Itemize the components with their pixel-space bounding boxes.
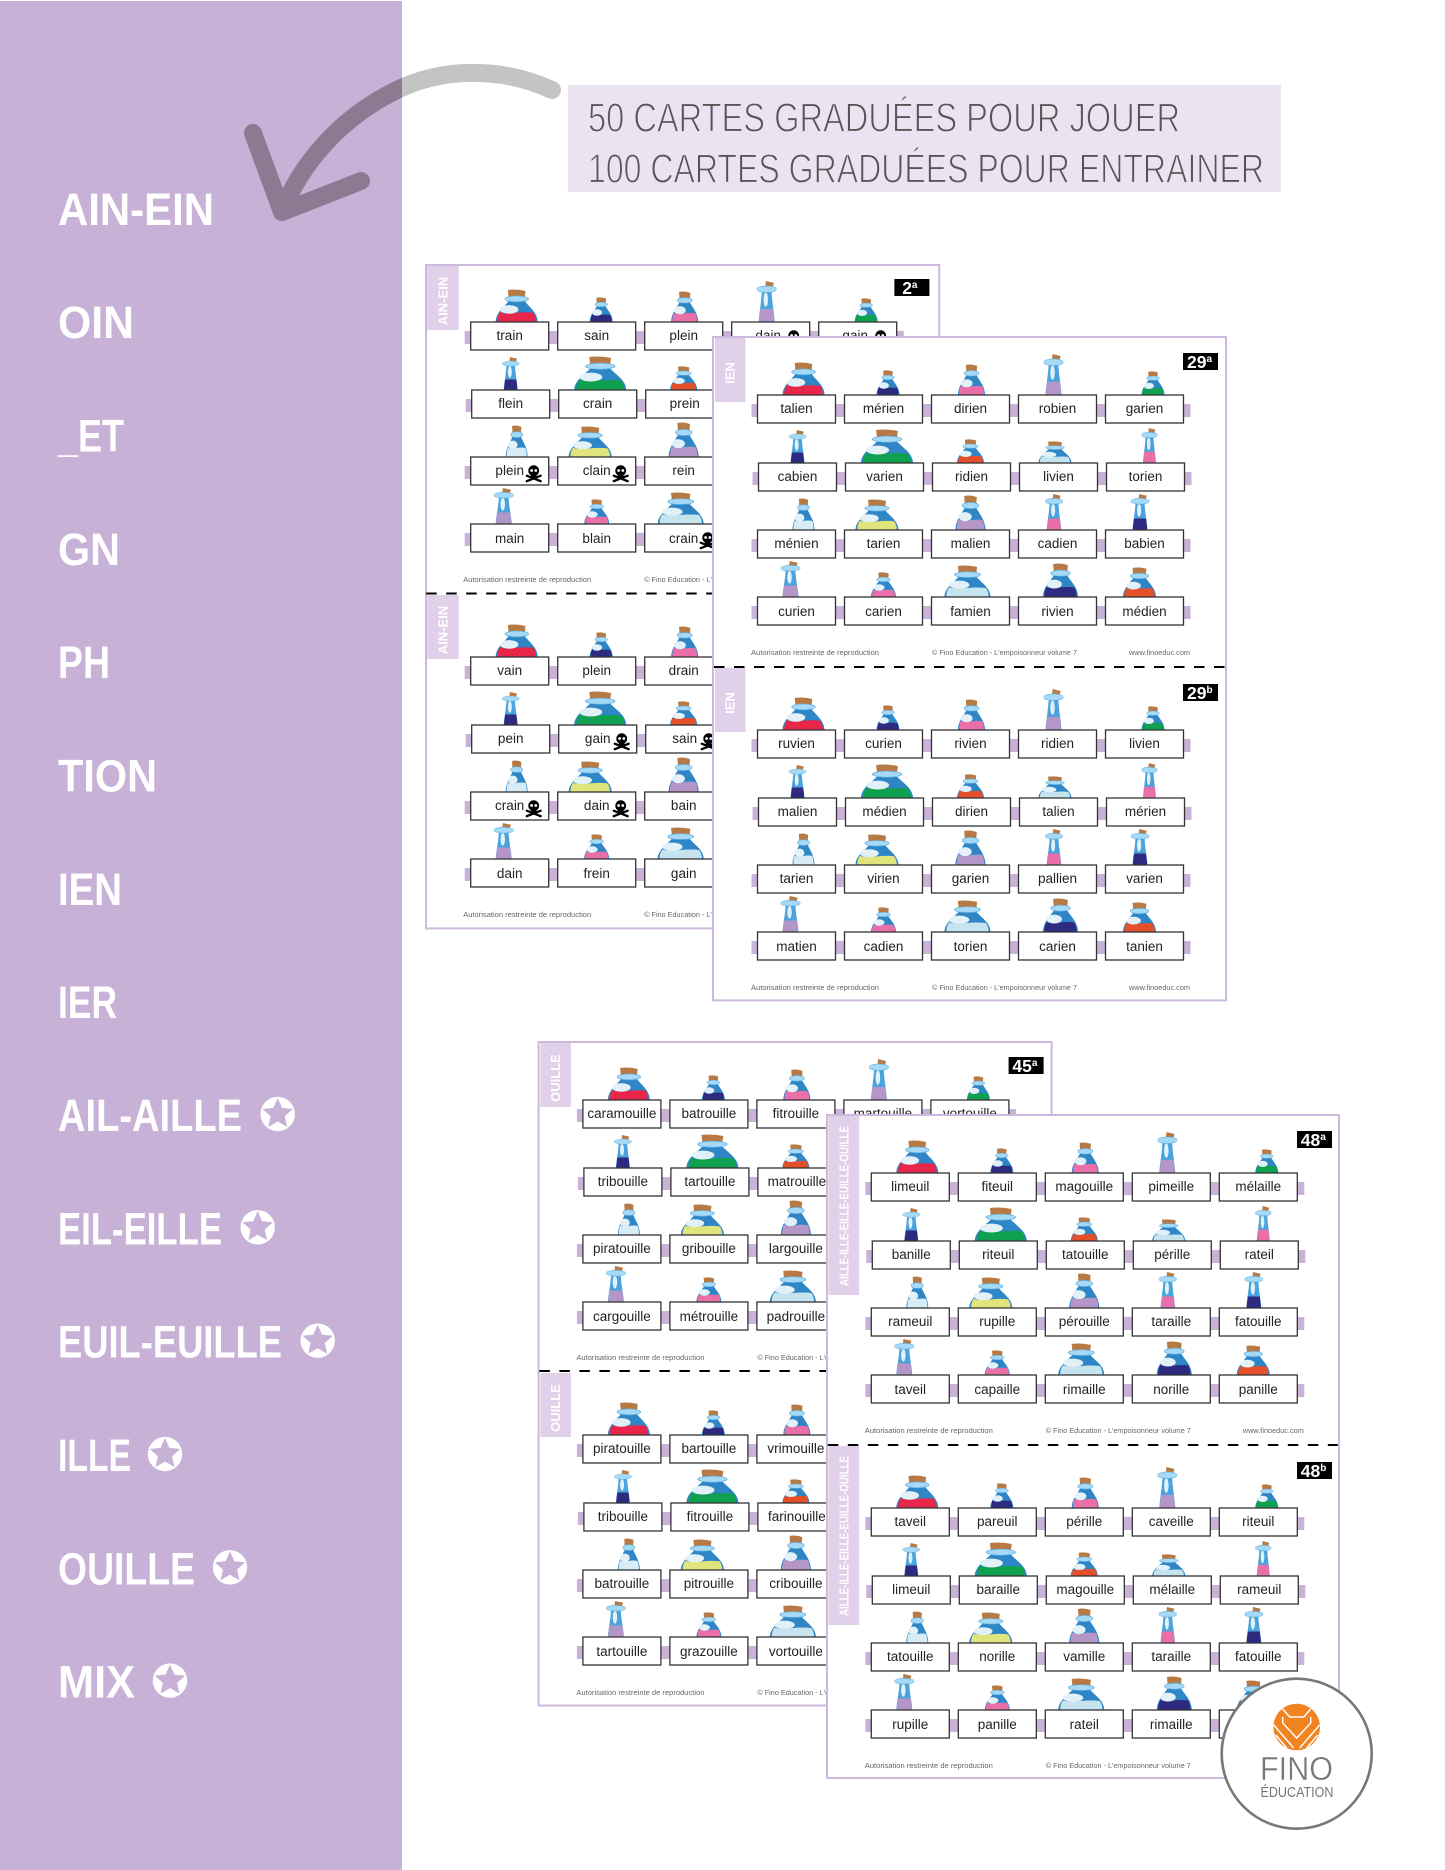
bottles and word cards — [752, 689, 1192, 960]
words row 4: rateil — [1070, 1717, 1099, 1732]
words row 1: garien — [1126, 401, 1163, 416]
words row 2: livien — [1043, 469, 1074, 484]
words row 3: ménien — [774, 536, 819, 551]
footer — [463, 576, 789, 584]
words row 3: tatouille — [887, 1649, 934, 1664]
words row 3: virien — [867, 871, 900, 886]
icon: star OUILLE — [213, 1550, 247, 1584]
icons: skulls row 3 — [527, 465, 628, 481]
sidebar item: _ET: _ET — [57, 411, 124, 462]
arrow: curved arrow pointing to sidebar — [253, 73, 552, 212]
words row 4: rupille — [892, 1717, 928, 1732]
badge: 29a — [1183, 352, 1218, 372]
bottles and word cards — [577, 1059, 1017, 1330]
words row 3: rupille — [979, 1314, 1015, 1329]
words row 3: crain — [495, 798, 524, 813]
sidebar item: OUILLE: OUILLE — [58, 1543, 195, 1594]
words row 2: dirien — [955, 804, 988, 819]
badge: 48a — [1297, 1130, 1332, 1150]
words row 1: mérien — [863, 401, 904, 416]
words row 3: pallien — [1038, 871, 1077, 886]
words row 4: frein — [584, 866, 610, 881]
icons: skulls row 3 — [527, 800, 628, 816]
badge: 29b: 29 — [1187, 683, 1206, 703]
words row 4: tartouille — [596, 1644, 647, 1659]
tab: OUILLE: OUILLE — [548, 1384, 563, 1432]
words row 2: rateil — [1245, 1247, 1274, 1262]
badge: 29b — [1183, 683, 1218, 703]
words row 4: matien — [776, 939, 817, 954]
footer: www.finoeduc.com — [1128, 985, 1190, 992]
sidebar item: GN: GN — [58, 524, 120, 575]
tab: AIN-EIN: AIN-EIN — [436, 606, 451, 654]
words row 3: taraille — [1151, 1649, 1191, 1664]
tab: mixed sounds: AILLE-ILLE-EILLE-EUILLE-OUILLE — [836, 1456, 851, 1616]
words row 1: train — [497, 328, 523, 343]
logo wordmark: FINO: FINO — [1260, 1750, 1333, 1787]
footer — [576, 1689, 903, 1697]
words row 4: blain — [582, 531, 611, 546]
tab: AIN-EIN — [427, 266, 459, 330]
bottles and word cards — [865, 1467, 1305, 1738]
sidebar item: PH: PH — [58, 637, 110, 688]
badge: 48b — [1297, 1461, 1332, 1481]
words row 3: cribouille — [769, 1576, 823, 1591]
words row 3: fatouille — [1235, 1649, 1282, 1664]
words row 4: métrouille — [680, 1309, 738, 1324]
words row 2: mérien — [1125, 804, 1166, 819]
sheet 29b — [715, 668, 1218, 992]
words row 3: pérouille — [1059, 1314, 1110, 1329]
words row 1: pimeille — [1148, 1179, 1194, 1194]
words row 1: drain — [669, 663, 699, 678]
words row 3: clain — [583, 463, 611, 478]
sidebar item: OIN: OIN — [58, 297, 134, 348]
tab: mixed sounds — [828, 1116, 859, 1295]
sheet 2b — [427, 595, 905, 919]
logo mark: orange chevrons — [1273, 1704, 1320, 1750]
badge: 2a: 2 — [902, 278, 912, 298]
words row 1: dain — [755, 328, 781, 343]
words row 1: dirien — [954, 401, 987, 416]
words row 3: plein — [495, 463, 524, 478]
words row 3: norille — [979, 1649, 1015, 1664]
footer: © Fino Education - L'empoisonneur volume 7 — [757, 1354, 903, 1362]
tab: OUILLE: OUILLE — [548, 1054, 563, 1102]
words row 2: tribouille — [598, 1174, 648, 1189]
words row 4: cadien — [864, 939, 903, 954]
words row 4: cargouille — [593, 1309, 651, 1324]
words row 2: matrouille — [768, 1174, 826, 1189]
words row 1: bartouille — [682, 1441, 736, 1456]
words row 1: robien — [1039, 401, 1076, 416]
words row 4: padrouille — [767, 1309, 825, 1324]
words row 3: largouille — [769, 1241, 823, 1256]
words row 1: ruvien — [778, 736, 815, 751]
icon: star EUIL-EUILLE — [300, 1324, 335, 1358]
words row 3: batrouille — [595, 1576, 649, 1591]
badge: 2a — [894, 278, 929, 298]
words row 4: rimaille — [1063, 1382, 1106, 1397]
words row 2: riteuil — [982, 1247, 1014, 1262]
words row 3: tarien — [780, 871, 813, 886]
words row 1: vain — [497, 663, 522, 678]
tab: IEN — [715, 668, 746, 732]
words row 1: riteuil — [1242, 1514, 1274, 1529]
words row 3: pitrouille — [684, 1576, 734, 1591]
words row 1: magouille — [1055, 1179, 1113, 1194]
words row 2: magouille — [1056, 1582, 1114, 1597]
words row 1: batrouille — [682, 1106, 736, 1121]
words row 2: cabien — [778, 469, 817, 484]
footer: © Fino Education - L'empoisonneur volume 7 — [932, 984, 1077, 992]
tab: IEN: IEN — [722, 692, 738, 714]
words row 4: famien — [950, 604, 991, 619]
bottles and word cards — [465, 616, 905, 887]
footer: © Fino Education - L'empoisonneur volume 7 — [1046, 1762, 1191, 1770]
sheet 48a — [828, 1116, 1332, 1435]
words row 2: crain — [583, 396, 612, 411]
bottles and word cards — [577, 1394, 1017, 1665]
words row 3: bain — [671, 798, 696, 813]
sheet 2a — [427, 266, 929, 584]
footer — [751, 649, 1190, 657]
footer: © Fino Education - L'empoisonneur volume 7 — [644, 576, 789, 584]
badge: 45a: 45 — [1012, 1056, 1032, 1076]
sheet 45b — [540, 1373, 1017, 1697]
words row 1: gain — [842, 328, 868, 343]
words row 4: main — [495, 531, 524, 546]
words row 1: livien — [1129, 736, 1160, 751]
words row 2: farinouille — [768, 1509, 826, 1524]
words row 3: rein — [672, 463, 695, 478]
footer: Autorisation restreinte de reproduction — [751, 650, 879, 657]
sidebar item: EIL-EILLE: EIL-EILLE — [58, 1203, 222, 1254]
footer: © Fino Education - L'empoisonneur volume 7 — [932, 649, 1077, 657]
words row 2: prein — [670, 396, 700, 411]
tab: AIN-EIN: AIN-EIN — [436, 277, 451, 325]
words row 3: fatouille — [1235, 1314, 1282, 1329]
footer: Autorisation restreinte de reproduction — [463, 577, 591, 584]
logo wordmark: ÉDUCATION: ÉDUCATION — [1260, 1784, 1334, 1801]
words row 2: mélaille — [1149, 1582, 1195, 1597]
words row 4: médien — [1122, 604, 1167, 619]
tab: IEN — [715, 338, 746, 402]
words row 2: tartouille — [684, 1174, 735, 1189]
panel: OUILLE card sheet — [539, 1042, 1052, 1706]
words row 1: curien — [865, 736, 902, 751]
badge: 45a: a — [1032, 1058, 1038, 1069]
footer: © Fino Education - L'empoisonneur volume 7 — [644, 911, 789, 919]
panel: mixed AILLE-ILLE-EILLE-EUILLE-OUILLE card sheet — [827, 1115, 1339, 1778]
words row 4: panille — [978, 1717, 1017, 1732]
tab: mixed sounds: AILLE-ILLE-EILLE-EUILLE-OUILLE — [836, 1126, 851, 1286]
sidebar item: TION: TION — [58, 750, 157, 802]
words row 2: banille — [892, 1247, 931, 1262]
words row 1: caramouille — [587, 1106, 656, 1121]
words row 3: rameuil — [888, 1314, 932, 1329]
words row 1: mélaille — [1235, 1179, 1281, 1194]
words row 2: pein — [498, 731, 523, 746]
icon: skull row 4 — [701, 532, 715, 548]
words row 1: caveille — [1149, 1514, 1194, 1529]
tab: OUILLE — [540, 1043, 571, 1107]
words row 2: torien — [1129, 469, 1162, 484]
footer — [463, 911, 789, 919]
words row 4: vortouille — [769, 1644, 823, 1659]
footer: © Fino Education - L'empoisonneur volume 7 — [757, 1689, 903, 1697]
words row 3: tarien — [867, 536, 900, 551]
words row 2: malien — [778, 804, 817, 819]
sidebar item: EUIL-EUILLE: EUIL-EUILLE — [58, 1317, 282, 1368]
callout line 2: 100 CARTES GRADUÉES POUR ENTRAINER — [588, 146, 1264, 192]
words row 2: tatouille — [1062, 1247, 1109, 1262]
words row 1: vortouille — [943, 1106, 997, 1121]
tab: IEN: IEN — [722, 362, 738, 384]
words row 2: baraille — [977, 1582, 1020, 1597]
words row 2: rameuil — [1237, 1582, 1281, 1597]
badge: 29a: 29 — [1187, 352, 1206, 372]
badge: 48b: 48 — [1301, 1461, 1320, 1481]
badge: 48a: a — [1320, 1132, 1326, 1143]
footer: Autorisation restreinte de reproduction — [865, 1763, 993, 1770]
icon: star ILLE — [148, 1437, 182, 1471]
sheet 45a — [540, 1043, 1044, 1362]
icon: star AIL-AILLE — [260, 1097, 295, 1131]
words row 2: tribouille — [598, 1509, 648, 1524]
footer: Autorisation restreinte de reproduction — [576, 1355, 705, 1362]
words row 4: dain — [497, 866, 522, 881]
words row 1: fitrouille — [773, 1106, 819, 1121]
words row 2: flein — [498, 396, 523, 411]
words row 4: panille — [1239, 1382, 1278, 1397]
words row 3: cadien — [1038, 536, 1077, 551]
badge: 48a: 48 — [1301, 1130, 1320, 1150]
words row 4: norille — [1153, 1382, 1189, 1397]
footer: Autorisation restreinte de reproduction — [865, 1428, 993, 1435]
panel: IEN card sheet — [713, 337, 1226, 1000]
tab: OUILLE — [540, 1373, 571, 1437]
words row 3: dain — [584, 798, 609, 813]
panel: sidebar sound list — [0, 1, 402, 1870]
icon: star MIX — [153, 1663, 187, 1698]
words row 4: carien — [865, 604, 902, 619]
bottles and word cards — [865, 1132, 1305, 1403]
words row 1: fiteuil — [982, 1179, 1013, 1194]
words row 1: talien — [780, 401, 813, 416]
footer: Autorisation restreinte de reproduction — [576, 1690, 705, 1697]
words row 2: pérille — [1154, 1247, 1190, 1262]
sidebar item: MIX: MIX — [58, 1657, 135, 1708]
footer: www.finoeduc.com — [1242, 1428, 1304, 1435]
words row 4: rimaille — [1150, 1717, 1193, 1732]
badge: 48b: b — [1320, 1463, 1326, 1474]
footer — [865, 1427, 1304, 1435]
words row 4: curien — [778, 604, 815, 619]
icons: skulls row 2 — [615, 733, 716, 749]
badge: 45a — [1009, 1056, 1044, 1076]
words row 2: gain — [585, 731, 610, 746]
words row 1: pareuil — [977, 1514, 1018, 1529]
icon: star EIL-EILLE — [241, 1210, 275, 1244]
words row 3: garien — [952, 871, 989, 886]
words row 1: limeuil — [891, 1179, 929, 1194]
words row 3: babien — [1124, 536, 1165, 551]
footer: Autorisation restreinte de reproduction — [751, 985, 879, 992]
words row 3: piratouille — [593, 1241, 651, 1256]
words row 3: malien — [951, 536, 990, 551]
footer: © Fino Education - L'empoisonneur volume 7 — [1046, 1427, 1191, 1435]
panel: AIN-EIN card sheet — [426, 265, 939, 928]
badge: 2a: a — [912, 280, 918, 291]
words row 4: grazouille — [680, 1644, 738, 1659]
sidebar item: ILLE: ILLE — [58, 1430, 131, 1481]
words row 1: taveil — [895, 1514, 926, 1529]
words row 2: varien — [866, 469, 903, 484]
words row 2: sain — [672, 731, 697, 746]
words row 3: varien — [1126, 871, 1163, 886]
icons: skulls row 1 — [787, 330, 888, 346]
footer — [576, 1354, 903, 1362]
words row 1: plein — [582, 663, 611, 678]
words row 1: vrimouille — [767, 1441, 824, 1456]
words row 4: gain — [671, 866, 696, 881]
sheet 29a — [715, 338, 1218, 657]
callout line 1: 50 CARTES GRADUÉES POUR JOUER — [588, 94, 1180, 140]
words row 3: taraille — [1151, 1314, 1191, 1329]
words row 1: rivien — [954, 736, 987, 751]
footer — [865, 1762, 1191, 1770]
words row 3: gribouille — [682, 1241, 736, 1256]
words row 1: piratouille — [593, 1441, 651, 1456]
sidebar item: AIL-AILLE: AIL-AILLE — [58, 1090, 242, 1141]
footer — [751, 984, 1190, 992]
words row 1: martouille — [854, 1106, 912, 1121]
sheet 48b — [828, 1446, 1332, 1770]
words row 1: ridien — [1041, 736, 1074, 751]
words row 4: crain — [669, 531, 698, 546]
words row 4: tanien — [1126, 939, 1163, 954]
words row 2: fitrouille — [687, 1509, 733, 1524]
bottles and word cards — [465, 281, 905, 552]
footer: Autorisation restreinte de reproduction — [463, 912, 591, 919]
words row 1: pérille — [1066, 1514, 1102, 1529]
words row 1: sain — [584, 328, 609, 343]
tab: AIN-EIN — [427, 595, 459, 659]
words row 3: vamille — [1063, 1649, 1105, 1664]
bottles and word cards — [752, 354, 1192, 625]
words row 2: talien — [1042, 804, 1075, 819]
tab: mixed sounds — [828, 1446, 859, 1625]
sidebar item: IER: IER — [58, 977, 117, 1028]
words row 4: torien — [954, 939, 987, 954]
words row 2: limeuil — [892, 1582, 930, 1597]
words row 2: médien — [862, 804, 907, 819]
words row 1: plein — [669, 328, 698, 343]
logo: Fino Education badge — [1222, 1679, 1372, 1829]
footer: www.finoeduc.com — [1128, 650, 1190, 657]
badge: 29a: a — [1206, 354, 1212, 365]
words row 2: ridien — [955, 469, 988, 484]
words row 4: rivien — [1041, 604, 1074, 619]
words row 4: taveil — [895, 1382, 926, 1397]
callout: card counts — [568, 85, 1281, 192]
sidebar item: AIN-EIN: AIN-EIN — [58, 184, 214, 235]
words row 4: capaille — [974, 1382, 1020, 1397]
words row 4: carien — [1039, 939, 1076, 954]
sidebar item: IEN: IEN — [58, 864, 122, 915]
badge: 29b: b — [1206, 685, 1213, 696]
